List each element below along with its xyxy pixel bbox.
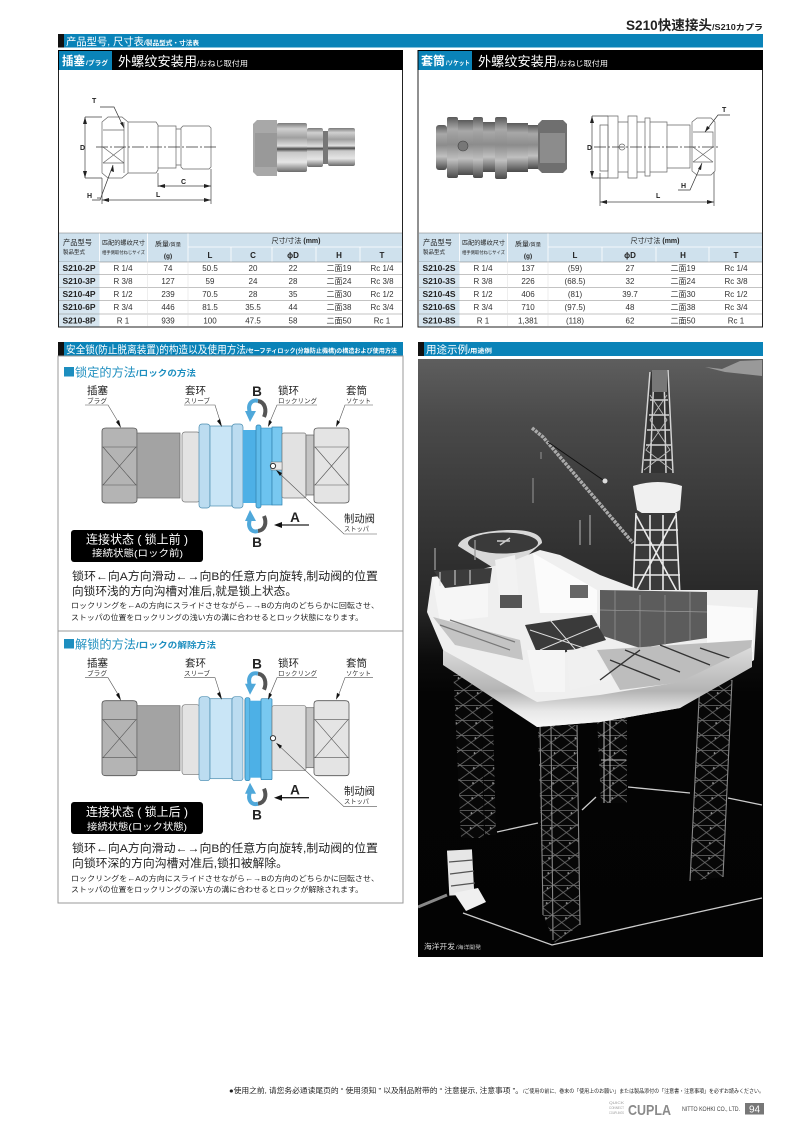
plug table row S210-2P: 22 <box>289 264 298 273</box>
socket table row S210-8S <box>422 316 745 326</box>
rotation arrow B bottom: B <box>252 808 262 823</box>
socket photo <box>436 117 567 179</box>
callout: socket: 套筒 <box>346 384 367 397</box>
plug table header: 相手側取付ねじサイズ <box>102 249 145 256</box>
socket table row S210-2S: 27 <box>626 264 635 273</box>
heading bar: application example: 用途示例 <box>426 343 468 356</box>
plug table row S210-6P: 81.5 <box>202 303 218 312</box>
plug table row S210-3P: Rc 3/8 <box>370 277 394 286</box>
mooring lines <box>463 787 762 945</box>
plug table row S210-4P: 35 <box>289 290 298 299</box>
slide arrow A: A <box>290 783 300 798</box>
subsea pipe <box>418 895 447 907</box>
heading: lock method: /ロックの方法 <box>136 368 197 378</box>
plug dimension letters: T <box>92 98 97 105</box>
heading bar: safety lock: 安全锁(防止脱离装置)的构造以及使用方法 <box>66 343 246 356</box>
distant ship <box>705 360 762 376</box>
heading: unlock method: 解锁的方法 <box>75 636 136 652</box>
heading bar: product model and dimensions <box>58 34 763 48</box>
plug table row S210-3P <box>62 277 394 286</box>
status box: after locking: 接続状態(ロック状態) <box>87 821 187 833</box>
socket table row S210-3S: (68.5) <box>565 277 586 286</box>
CUPLA logo: COUPLINGS <box>609 1110 624 1115</box>
plug table row S210-2P: 50.5 <box>202 264 218 273</box>
slide arrow A <box>274 783 309 801</box>
crane boom <box>532 428 633 543</box>
socket table header: 匹配的螺纹尺寸 <box>462 239 505 247</box>
socket panel header: 套筒 <box>421 53 445 68</box>
plug panel header: 外螺纹安装用 <box>118 54 197 69</box>
socket table row S210-2S: S210-2S <box>422 264 456 273</box>
footer notice <box>229 1086 764 1095</box>
socket table header <box>419 233 762 262</box>
plug table row S210-6P: Rc 3/4 <box>370 303 394 312</box>
heading bar: safety lock: /セーフティロック(分離防止機構)の構造および使用方法 <box>246 347 397 355</box>
stopper <box>270 736 276 741</box>
socket table row S210-6S: R 3/4 <box>473 303 493 312</box>
socket dimension drawing <box>590 115 730 206</box>
plug table row S210-6P: 44 <box>289 303 298 312</box>
rotation arrow B bottom <box>245 783 265 823</box>
company name: NITTO KOHKI CO., LTD. <box>682 1107 740 1113</box>
socket table row S210-6S: 48 <box>626 303 635 312</box>
callout: stopper <box>276 470 377 534</box>
helideck <box>458 530 542 567</box>
status box: before locking: 接続状態(ロック前) <box>92 548 183 560</box>
CUPLA logo: QUICK <box>609 1100 624 1105</box>
drilling derrick <box>633 370 682 597</box>
plug table header: ϕD <box>287 251 299 260</box>
plug table row S210-4P: 239 <box>161 290 175 299</box>
diagram: unlocked state <box>85 657 377 823</box>
heading bar: product model and dimensions: 产品型号, 尺寸表 <box>66 35 144 48</box>
text block: unlock instructions <box>71 841 379 894</box>
callout: lock ring: ロックリング <box>278 669 318 678</box>
panel: safety lock usage <box>58 356 403 903</box>
callout: lock ring: 锁环 <box>278 384 299 397</box>
photo caption: 海洋开发 <box>424 941 456 951</box>
plug panel header <box>58 50 403 70</box>
plug table row S210-8P: S210-8P <box>62 316 96 326</box>
socket table row S210-8S: 62 <box>626 316 635 326</box>
socket table header: 相手側取付ねじサイズ <box>462 249 505 256</box>
rotation arrow B bottom: B <box>252 535 262 550</box>
hull band <box>443 647 752 727</box>
text block: lock instructions: ストッパの位置をロックリングの浅い方の溝に合わせるとロック状態になります。 <box>71 613 363 622</box>
socket table row S210-8S: Rc 1 <box>728 316 745 326</box>
socket table row S210-6S: 710 <box>521 303 535 312</box>
page title: S210快速接头 <box>626 18 712 33</box>
diagram: locked state <box>85 384 377 550</box>
plug table row S210-8P <box>62 316 391 326</box>
socket table header: /質量 <box>529 241 542 248</box>
socket panel header: /ソケット <box>446 59 470 67</box>
heading: lock method: 锁定的方法 <box>75 364 136 380</box>
plug table row S210-2P: S210-2P <box>62 264 96 273</box>
socket table header: (g) <box>524 253 532 260</box>
plug dimension drawing <box>83 107 216 204</box>
plug table row S210-3P: 28 <box>289 277 298 286</box>
plug dimension letters: D <box>80 145 85 152</box>
plug table header: 製品型式 <box>63 248 85 256</box>
plug table row S210-2P <box>62 264 394 273</box>
slide arrow A: A <box>290 510 300 525</box>
plug table header: C <box>250 251 256 260</box>
text block: unlock instructions: ストッパの位置をロックリングの深い方の溝に合わせるとロックが解除されます。 <box>71 885 363 894</box>
socket panel header <box>418 50 763 70</box>
plug table row S210-4P: 二面30 <box>327 290 352 299</box>
page title <box>626 18 763 33</box>
plug table row S210-3P: 二面24 <box>327 277 352 286</box>
callout: sleeve: スリーブ <box>184 669 210 678</box>
coupling body <box>102 697 349 781</box>
callout: plug <box>85 384 121 428</box>
heading bar: application example: /用途例 <box>468 347 492 355</box>
socket table row S210-4S: Rc 1/2 <box>724 290 748 299</box>
socket dimension letters: L <box>656 193 661 200</box>
socket table row S210-8S: 二面50 <box>671 316 696 326</box>
plug table row S210-3P: 127 <box>161 277 175 286</box>
callout: lock ring: ロックリング <box>278 396 318 405</box>
plug table row S210-8P: Rc 1 <box>374 316 391 326</box>
socket table header: 製品型式 <box>423 248 445 256</box>
callout: lock ring <box>268 657 318 700</box>
page number <box>745 1103 764 1116</box>
rotation arrow B top <box>245 384 265 422</box>
callout: socket <box>336 384 373 427</box>
callout: socket <box>336 657 373 700</box>
socket table row S210-4S: 406 <box>521 290 535 299</box>
plug table header <box>59 233 402 262</box>
plug table row S210-3P: S210-3P <box>62 277 96 286</box>
plug dimension letters: H <box>87 193 92 200</box>
plug dimension letters: L <box>156 192 161 199</box>
text block: lock instructions: ロックリングを←Aの方向にスライドさせながら←→Bの方向のどちらかに回転させ、 <box>71 601 379 610</box>
socket table row S210-4S: 二面30 <box>671 290 696 299</box>
rotation arrow B top: B <box>252 384 262 399</box>
socket table header: T <box>734 251 739 260</box>
socket table row S210-4S: S210-4S <box>422 290 456 299</box>
plug table row S210-6P: 446 <box>161 303 175 312</box>
platform deck and hull <box>427 515 758 727</box>
socket table row S210-3S: R 3/8 <box>473 277 493 286</box>
socket table row S210-3S: 226 <box>521 277 535 286</box>
socket table header: 尺寸/寸法 (mm) <box>630 236 680 245</box>
plug table header: /質量 <box>169 241 182 248</box>
CUPLA logo: CONNECT <box>609 1105 624 1110</box>
plug table header: 产品型号 <box>63 238 92 247</box>
socket dimension letters: D <box>587 145 592 152</box>
socket table row S210-6S: (97.5) <box>565 303 586 312</box>
plug table row S210-6P: R 3/4 <box>113 303 133 312</box>
status box: before locking <box>71 530 203 562</box>
plug table row S210-6P: 二面38 <box>327 303 352 312</box>
plug table row S210-2P: 74 <box>164 264 173 273</box>
socket dimension letters: H <box>681 183 686 190</box>
heading bar: application example <box>418 342 763 356</box>
socket table row S210-2S: Rc 1/4 <box>724 264 748 273</box>
panel: plug <box>58 50 403 327</box>
plug table row S210-3P: R 3/8 <box>113 277 133 286</box>
photo caption <box>424 942 481 950</box>
CUPLA logo: CUPLA <box>628 1102 671 1119</box>
socket table header: H <box>680 251 686 260</box>
small jacket platform <box>447 849 486 911</box>
plug table row S210-4P: 70.5 <box>202 290 218 299</box>
socket table row S210-3S: S210-3S <box>422 277 456 286</box>
socket table header: ϕD <box>624 251 636 260</box>
footer notice: /ご使用の前に、巻末の「使用上のお願い」または製品添付の「注意書・注意事項」を必ずお読みください。 <box>523 1087 764 1095</box>
plug table row S210-2P: 20 <box>249 264 258 273</box>
plug table row S210-6P: S210-6P <box>62 303 96 312</box>
socket table row S210-3S: 二面24 <box>671 277 696 286</box>
callout: plug: ブラグ <box>87 396 108 405</box>
heading: unlock method: /ロックの解除方法 <box>136 640 217 650</box>
socket table row S210-2S: 137 <box>521 264 535 273</box>
photo: offshore oil platform <box>418 359 763 957</box>
socket table row S210-4S: (81) <box>568 290 582 299</box>
socket table row S210-2S: (59) <box>568 264 582 273</box>
plug dimension letters: C <box>181 179 186 186</box>
plug table header: L <box>208 251 213 260</box>
plug table model column <box>59 262 100 326</box>
socket dimension letters <box>587 107 727 200</box>
callout: sleeve: スリーブ <box>184 396 210 405</box>
socket table row S210-4S <box>422 290 748 299</box>
plug table row S210-4P: 28 <box>249 290 258 299</box>
plug panel header: /おねじ取付用 <box>197 58 248 68</box>
callout: sleeve <box>184 657 222 700</box>
status box: after locking: 连接状态 ( 锁上后 ) <box>86 804 188 819</box>
footer notice: ●使用之前, 请您务必通读尾页的 “ 使用须知 ” 以及制品附带的 “ 注意提示, 注意事项 ”。 <box>229 1086 523 1095</box>
plug table row S210-3P: 24 <box>249 277 258 286</box>
socket dimension letters: T <box>722 107 727 114</box>
status box: after locking <box>71 802 203 834</box>
callout: socket: ソケット <box>346 397 371 405</box>
heading: unlock method <box>64 636 217 652</box>
plug table row S210-2P: R 1/4 <box>113 264 133 273</box>
callout: plug: 插塞 <box>87 657 108 670</box>
plug table header: H <box>336 251 342 260</box>
socket table model column <box>419 262 460 326</box>
callout: sleeve: 套环 <box>185 384 206 397</box>
CUPLA logo <box>609 1100 671 1119</box>
socket table header: 质量 <box>515 239 530 248</box>
plug table row S210-4P: R 1/2 <box>113 290 133 299</box>
plug panel header: 插塞 <box>62 53 85 68</box>
callout: socket: 套筒 <box>346 657 367 670</box>
rotation arrow B bottom <box>245 510 265 550</box>
rotation arrow B top: B <box>252 657 262 672</box>
text block: unlock instructions: 向锁环深的方向沟槽对准后,锁扣被解除。 <box>72 856 288 870</box>
plug table row S210-8P: 二面50 <box>327 316 352 326</box>
page title: /S210カプラ <box>712 23 763 32</box>
socket table row S210-6S: S210-6S <box>422 303 456 312</box>
socket table row S210-8S: 1,381 <box>518 316 539 326</box>
plug table row S210-4P: S210-4P <box>62 290 96 299</box>
socket panel header: /おねじ取付用 <box>557 58 608 68</box>
callout: stopper: ストッパ <box>344 798 369 806</box>
socket table row S210-3S <box>422 277 748 286</box>
callout: plug: 插塞 <box>87 384 108 397</box>
socket panel header: 外螺纹安装用 <box>478 54 557 69</box>
callout: sleeve <box>184 384 222 427</box>
plug table row S210-3P: 59 <box>206 277 215 286</box>
plug table row S210-8P: 100 <box>203 316 217 326</box>
stopper <box>270 462 282 470</box>
callout: stopper: 制动阀 <box>344 785 375 798</box>
socket table header: L <box>573 251 578 260</box>
callout: plug: ブラグ <box>87 669 108 678</box>
socket table header: 产品型号 <box>423 238 452 247</box>
support legs <box>453 665 732 943</box>
rotation arrow B top <box>245 657 265 695</box>
socket table row S210-6S: 二面38 <box>671 303 696 312</box>
plug table row S210-6P <box>62 303 394 312</box>
text block: unlock instructions: ロックリングを←Aの方向にスライドさせながら←→Bの方向のどちらかに回転させ、 <box>71 874 379 883</box>
plug table row S210-8P: 939 <box>161 316 175 326</box>
socket table row S210-3S: Rc 3/8 <box>724 277 748 286</box>
photo caption: /海洋開発 <box>456 944 481 951</box>
heading bar: product model and dimensions: /製品型式・寸法表 <box>144 38 200 47</box>
socket table row S210-2S: 二面19 <box>671 264 696 273</box>
socket specification table <box>419 233 762 326</box>
plug table row S210-6P: 35.5 <box>245 303 261 312</box>
plug table row S210-8P: R 1 <box>117 316 130 326</box>
plug table header: T <box>380 251 385 260</box>
socket table row S210-3S: 32 <box>626 277 635 286</box>
socket table row S210-6S: Rc 3/4 <box>724 303 748 312</box>
socket table row S210-8S: (118) <box>566 316 584 326</box>
text block: unlock instructions: 锁环←向A方向滑动←→向B的任意方向旋转,制动阀的位置 <box>72 841 378 855</box>
plug table header: 质量 <box>155 239 170 248</box>
plug panel header: /プラグ <box>86 58 109 67</box>
socket table row S210-8S: R 1 <box>477 316 490 326</box>
plug table row S210-8P: 58 <box>289 316 298 326</box>
plug specification table <box>59 233 402 326</box>
plug table row S210-2P: 二面19 <box>327 264 352 273</box>
plug table row S210-4P: Rc 1/2 <box>370 290 394 299</box>
plug table header: (g) <box>164 253 172 260</box>
socket table row S210-4S: R 1/2 <box>473 290 493 299</box>
coupling body <box>102 424 349 508</box>
page number: 94 <box>749 1104 760 1116</box>
heading bar: safety lock <box>58 342 403 356</box>
plug table header: 尺寸/寸法 (mm) <box>271 236 321 245</box>
slide arrow A <box>274 510 309 528</box>
text block: lock instructions: 向锁环浅的方向沟槽对准后,就是锁上状态。 <box>72 584 297 598</box>
callout: stopper: 制动阀 <box>344 512 375 525</box>
callout: socket: ソケット <box>346 670 371 678</box>
socket table row S210-8S: S210-8S <box>422 316 456 326</box>
callout: lock ring: 锁环 <box>278 657 299 670</box>
callout: stopper <box>276 743 377 807</box>
plug table row S210-4P <box>62 290 394 299</box>
plug table row S210-2P: Rc 1/4 <box>370 264 394 273</box>
status box: before locking: 连接状态 ( 锁上前 ) <box>86 532 188 546</box>
socket table row S210-2S <box>422 264 748 273</box>
callout: sleeve: 套环 <box>185 657 206 670</box>
callout: lock ring <box>268 384 318 427</box>
panel: socket <box>418 50 763 327</box>
plug table header: 匹配的螺纹尺寸 <box>102 239 145 247</box>
socket table row S210-4S: 39.7 <box>622 290 638 299</box>
callout: plug <box>85 657 121 701</box>
plug photo <box>253 120 355 176</box>
callout: stopper: ストッパ <box>344 525 369 533</box>
text block: lock instructions: 锁环←向A方向滑动←→向B的任意方向旋转,制动阀的位置 <box>72 569 378 583</box>
plug dimension letters <box>80 98 186 200</box>
plug table row S210-8P: 47.5 <box>245 316 261 326</box>
text block: lock instructions <box>71 569 379 622</box>
heading: lock method <box>64 364 197 380</box>
socket table row S210-2S: R 1/4 <box>473 264 493 273</box>
socket table row S210-6S <box>422 303 748 312</box>
